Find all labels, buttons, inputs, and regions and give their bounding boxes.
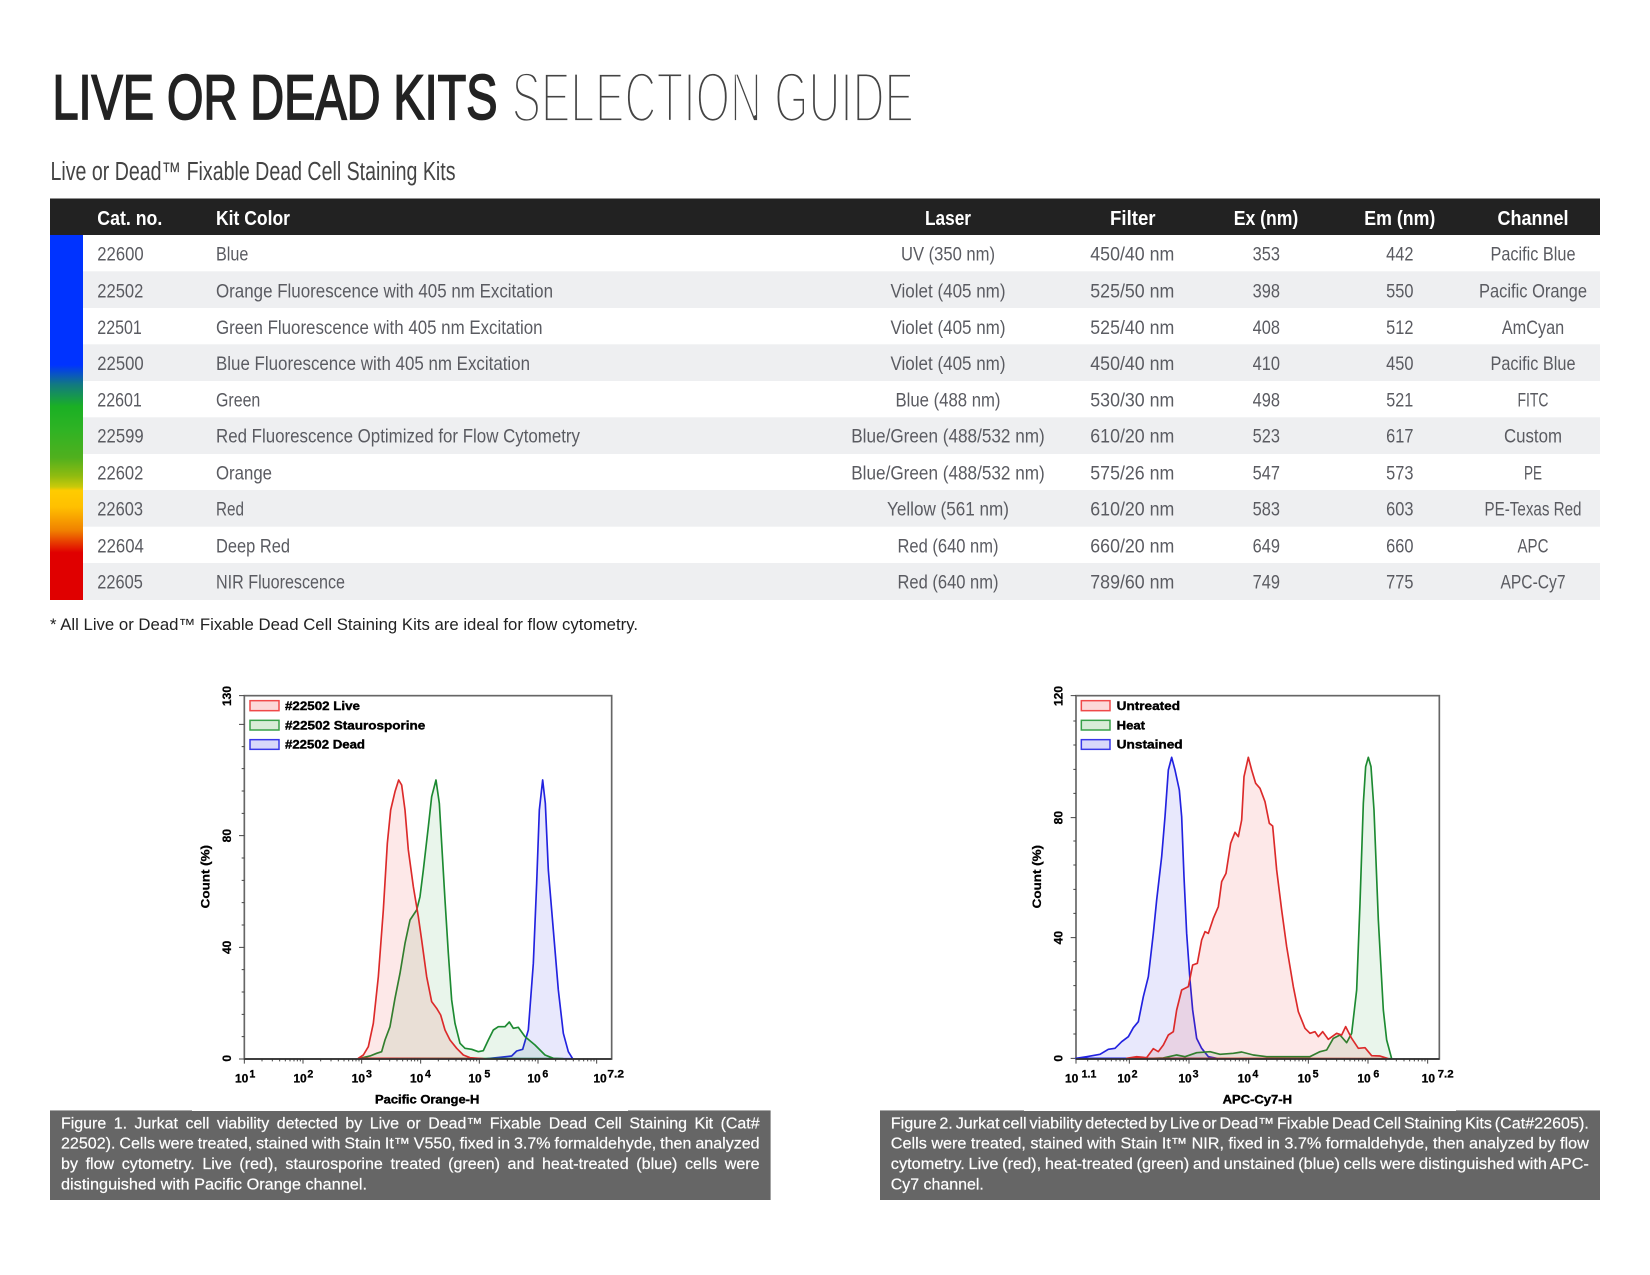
row 22599: [83, 417, 1600, 454]
x axis labels: 10: [1357, 1072, 1371, 1086]
caption: figure 1: distinguished with Pacific Orange channel.: [61, 1176, 367, 1193]
row 22605: 749: [1253, 572, 1280, 594]
row 22603: Yellow (561 nm): [887, 499, 1009, 521]
legend: #22502 Live: [285, 699, 360, 713]
row 22604: Deep Red: [216, 536, 290, 558]
legend: #22502 Staurosporine: [285, 718, 425, 732]
table header row: Kit Color: [216, 208, 290, 230]
row 22603: 603: [1386, 499, 1413, 521]
row 22502: 22502: [97, 281, 143, 303]
chart: figure 2 APC-Cy7 histogram: [1030, 686, 1454, 1106]
plot area and axes: [239, 696, 612, 1064]
row 22604: 660: [1386, 536, 1413, 558]
row 22605: Red (640 nm): [898, 572, 998, 594]
row 22599: Custom: [1504, 426, 1562, 448]
row 22605: 775: [1386, 572, 1413, 594]
x axis labels: Pacific Orange-H: [375, 1092, 479, 1106]
row 22603: Red: [216, 499, 244, 521]
row 22602: 22602: [97, 463, 143, 485]
x axis labels: 2: [307, 1068, 313, 1080]
y axis labels: 130: [220, 686, 234, 706]
x axis labels: 1: [249, 1068, 255, 1080]
row 22501: 525/40 nm: [1090, 317, 1174, 339]
legend: #22502 Dead: [285, 738, 365, 752]
row 22502: 525/50 nm: [1090, 281, 1174, 303]
footnote: * All Live or Dead™ Fixable Dead Cell Staining Kits are ideal for flow cytometry.: [50, 616, 638, 634]
caption: figure 1: [50, 1110, 771, 1200]
y axis labels: 80: [220, 829, 234, 842]
x axis labels: 4: [425, 1068, 431, 1080]
x axis labels: 10: [1298, 1072, 1311, 1086]
row 22502: Pacific Orange: [1479, 281, 1587, 303]
caption: figure 2: Cy7 channel.: [891, 1176, 984, 1193]
row 22501: Green Fluorescence with 405 nm Excitation: [216, 317, 542, 339]
table header row: Channel: [1498, 208, 1568, 230]
row 22502: 550: [1386, 281, 1413, 303]
row 22601: 22601: [97, 390, 142, 412]
table header row: Laser: [925, 208, 971, 230]
table header row: Cat. no.: [97, 208, 162, 230]
caption: figure 2: cytometry. Live (red), heat-treated (green) and unstained (blue) cells were distinguished with APC-: [891, 1156, 1589, 1173]
x axis labels: 10: [410, 1072, 424, 1086]
row 22601: 521: [1386, 390, 1413, 412]
y axis labels: 40: [220, 940, 234, 954]
row 22604: 649: [1253, 536, 1280, 558]
row 22602: [97, 463, 1542, 485]
chart: figure 1 Pacific Orange histogram: [198, 686, 624, 1106]
row 22500: [83, 344, 1600, 381]
x axis labels: 5: [484, 1068, 490, 1080]
row 22603: 22603: [97, 499, 143, 521]
row 22600: 442: [1386, 244, 1413, 266]
row 22599: 523: [1253, 426, 1280, 448]
row 22500: 450: [1386, 353, 1413, 375]
row 22502: Violet (405 nm): [890, 281, 1006, 303]
table header row: Em (nm): [1364, 208, 1435, 230]
green curve: staurosporine: [360, 780, 563, 1059]
legend: [250, 699, 425, 752]
x axis labels: 10: [1117, 1072, 1131, 1086]
row 22602: Orange: [216, 463, 272, 485]
caption: figure 2: Figure 2. Jurkat cell viability detected by Live or Dead™ Fixable Dead Cell Staining Kits (Cat#22605).: [891, 1115, 1589, 1132]
row 22500: Pacific Blue: [1490, 353, 1576, 375]
row 22502: 398: [1253, 281, 1280, 303]
row 22605: 22605: [97, 572, 143, 594]
row 22501: [97, 317, 1564, 339]
y axis labels: 120: [1052, 686, 1066, 706]
legend: Untreated: [1117, 699, 1180, 713]
x axis labels: 10: [1178, 1072, 1192, 1086]
x axis labels: 7.2: [607, 1068, 624, 1080]
x axis labels: 6: [1373, 1068, 1379, 1080]
row 22599: 22599: [97, 426, 144, 448]
x axis labels: 1.1: [1082, 1068, 1096, 1080]
caption: figure 2: Cells were treated, stained with Stain It™ NIR, fixed in 3.7% formaldehyde, then analyzed by flow: [891, 1136, 1590, 1153]
row 22501: AmCyan: [1502, 317, 1564, 339]
subtitle: Live or Dead™ Fixable Dead Cell Staining Kits: [50, 158, 456, 186]
legend: Unstained: [1117, 738, 1183, 752]
y axis labels: [1030, 686, 1066, 1062]
caption: figure 1: by flow cytometry. Live (red), staurosporine treated (green) and heat-treated (blue) cells were: [61, 1156, 760, 1173]
baseline: [244, 1056, 612, 1061]
row 22602: 575/26 nm: [1090, 463, 1174, 485]
title: SELECTION GUIDE: [512, 59, 914, 138]
y axis labels: 0: [220, 1055, 234, 1062]
row 22599: 617: [1386, 426, 1413, 448]
legend: [1081, 699, 1183, 752]
row 22600: 22600: [97, 244, 144, 266]
row 22502: Orange Fluorescence with 405 nm Excitation: [216, 281, 553, 303]
baseline: [1076, 1056, 1439, 1061]
row 22602: Blue/Green (488/532 nm): [851, 463, 1045, 485]
row 22600: UV (350 nm): [901, 244, 995, 266]
row 22501: 22501: [97, 317, 142, 339]
y axis labels: 80: [1052, 811, 1066, 824]
x axis labels: 2: [1132, 1068, 1138, 1080]
x axis labels: 10: [352, 1072, 365, 1086]
row 22604: [97, 536, 1548, 558]
row 22603: PE-Texas Red: [1484, 499, 1582, 521]
row 22501: 408: [1253, 317, 1280, 339]
y axis labels: [198, 686, 234, 1062]
row 22500: 450/40 nm: [1090, 353, 1174, 375]
row 22604: 660/20 nm: [1090, 536, 1174, 558]
row 22600: 450/40 nm: [1090, 244, 1174, 266]
title: LIVE OR DEAD KITS: [52, 63, 498, 133]
row 22600: [97, 244, 1575, 266]
y axis labels: 0: [1052, 1055, 1066, 1062]
legend: Heat: [1117, 718, 1145, 732]
x axis labels: 5: [1313, 1068, 1319, 1080]
row 22599: Red Fluorescence Optimized for Flow Cytometry: [216, 426, 580, 448]
spectrum color bar: [50, 235, 83, 600]
table header row: Ex (nm): [1234, 208, 1298, 230]
row 22500: Blue Fluorescence with 405 nm Excitation: [216, 353, 530, 375]
table header row: Filter: [1110, 208, 1156, 230]
y axis labels: Count (%): [198, 845, 212, 908]
y axis labels: Count (%): [1030, 845, 1044, 908]
row 22603: 583: [1253, 499, 1280, 521]
row 22600: 353: [1253, 244, 1280, 266]
x axis labels: [235, 1068, 624, 1106]
x axis labels: 10: [235, 1072, 249, 1086]
x axis labels: 10: [1065, 1072, 1079, 1086]
x axis labels: 10: [468, 1072, 482, 1086]
x axis labels: 3: [1193, 1068, 1199, 1080]
table header row: [50, 198, 1600, 235]
green curve: heat: [1143, 757, 1392, 1059]
row 22605: [83, 563, 1600, 600]
row 22605: APC-Cy7: [1500, 572, 1566, 594]
row 22500: 22500: [97, 353, 144, 375]
row 22605: NIR Fluorescence: [216, 572, 345, 594]
row 22501: Violet (405 nm): [890, 317, 1006, 339]
row 22604: 22604: [97, 536, 144, 558]
x axis labels: 10: [1238, 1072, 1251, 1086]
row 22605: 789/60 nm: [1090, 572, 1174, 594]
row 22500: 410: [1253, 353, 1280, 375]
row 22602: 547: [1253, 463, 1280, 485]
row 22601: Green: [216, 390, 260, 412]
x axis labels: APC-Cy7-H: [1223, 1092, 1292, 1106]
row 22602: 573: [1386, 463, 1413, 485]
y axis labels: 40: [1052, 931, 1066, 944]
caption: figure 1: 22502). Cells were treated, stained with Stain It™ V550, fixed in 3.7% formaldehyde, then analyzed: [61, 1136, 760, 1153]
row 22601: [97, 390, 1548, 412]
row 22501: 512: [1386, 317, 1413, 339]
row 22599: Blue/Green (488/532 nm): [851, 426, 1045, 448]
x axis labels: 4: [1252, 1068, 1258, 1080]
row 22601: FITC: [1518, 390, 1548, 412]
x axis labels: 10: [293, 1072, 307, 1086]
caption: figure 1: Figure 1. Jurkat cell viability detected by Live or Dead™ Fixable Dead Cell Staining Kit (Cat#: [61, 1115, 760, 1132]
x axis labels: [1065, 1068, 1454, 1106]
blue curve: unstained: [1076, 757, 1217, 1058]
row 22601: Blue (488 nm): [896, 390, 1000, 412]
x axis labels: 10: [527, 1072, 541, 1086]
red curve: untreated: [1127, 757, 1388, 1059]
row 22600: Blue: [216, 244, 248, 266]
table: staining kits: [50, 198, 1600, 600]
caption: figure 2: [880, 1110, 1600, 1200]
blue curve: dead: [487, 780, 573, 1059]
plot area and axes: [1071, 696, 1439, 1064]
x axis labels: 10: [593, 1072, 607, 1086]
row 22500: Violet (405 nm): [890, 353, 1006, 375]
x axis labels: 10: [1422, 1072, 1435, 1086]
red curve: live: [358, 780, 483, 1059]
row 22604: Red (640 nm): [898, 536, 998, 558]
row 22602: PE: [1524, 463, 1542, 485]
row 22601: 530/30 nm: [1090, 390, 1174, 412]
row 22604: APC: [1518, 536, 1548, 558]
x axis labels: 7.2: [1438, 1068, 1454, 1080]
row 22600: Pacific Blue: [1490, 244, 1576, 266]
x axis labels: 6: [542, 1068, 548, 1080]
x axis labels: 3: [366, 1068, 372, 1080]
row 22599: 610/20 nm: [1090, 426, 1174, 448]
row 22502: [83, 271, 1600, 308]
row 22603: [83, 490, 1600, 527]
row 22601: 498: [1253, 390, 1280, 412]
title: [52, 59, 914, 138]
row 22603: 610/20 nm: [1090, 499, 1174, 521]
